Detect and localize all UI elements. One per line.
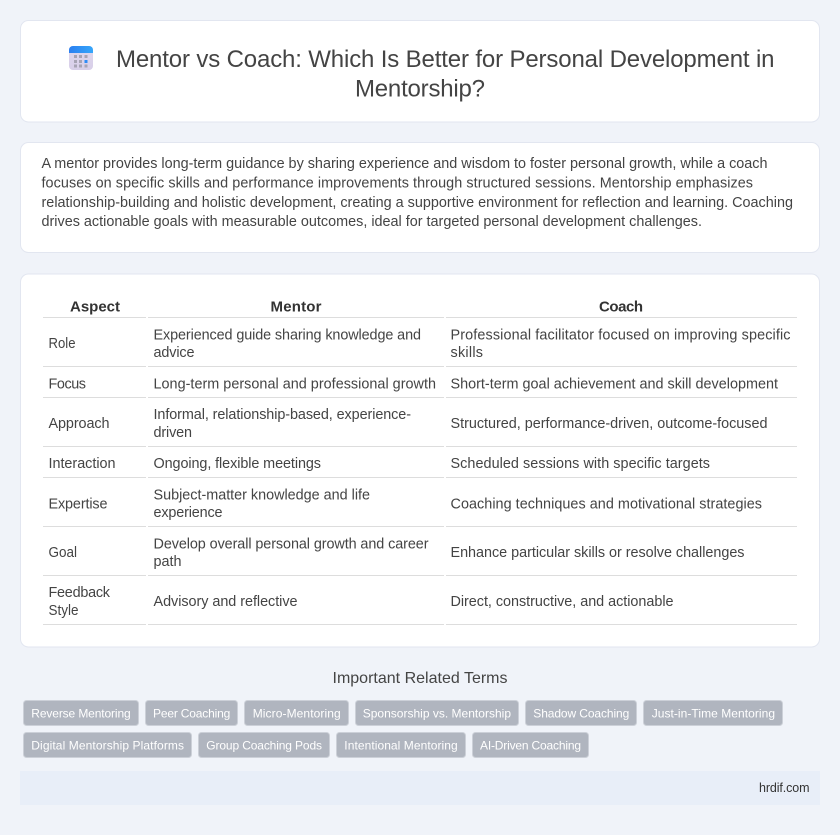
row: Role: advice <box>154 345 194 361</box>
row: Expertise: Coaching techniques and motivational strategies <box>450 496 762 512</box>
footer: hrdif.com <box>759 781 810 795</box>
row: Feedback Style <box>48 585 674 619</box>
tag: Reverse Mentoring <box>31 706 131 720</box>
row: Role: skills <box>450 345 483 361</box>
tag: Sponsorship vs. Mentorship <box>363 706 511 720</box>
row: Approach: Structured, performance-driven, outcome-focused <box>450 416 768 432</box>
text block: summary: drives actionable goals with measurable outcomes, ideal for targeted personal development challenges. <box>42 214 702 230</box>
row: Expertise: Expertise <box>48 496 108 512</box>
row: Expertise: experience <box>154 505 222 521</box>
tag <box>146 700 238 726</box>
row: Role <box>48 328 790 361</box>
tag: Micro-Mentoring <box>253 706 341 720</box>
row: Expertise <box>48 488 762 521</box>
row: Approach <box>48 407 768 441</box>
tag: Just-in-Time Mentoring <box>652 706 775 720</box>
row: Role: Experienced guide sharing knowledge and <box>154 328 421 344</box>
tag <box>24 700 138 726</box>
row: Goal: Develop overall personal growth and career <box>154 536 429 552</box>
tag: Digital Mentorship Platforms <box>31 738 184 752</box>
row: Interaction: Ongoing, flexible meetings <box>154 456 321 472</box>
row: Focus: Short-term goal achievement and skill development <box>450 376 778 392</box>
row: Interaction: Scheduled sessions with specific targets <box>450 456 710 472</box>
table header row: Coach <box>599 298 643 316</box>
row: Goal: Enhance particular skills or resolve challenges <box>450 545 744 561</box>
text block: summary: A mentor provides long-term guidance by sharing experience and wisdom to foster personal growth, while a coach <box>42 156 768 172</box>
tag: AI-Driven Coaching <box>480 738 581 752</box>
row: Role: Professional facilitator focused on improving specific <box>450 328 790 344</box>
table header row: Aspect <box>70 298 120 316</box>
table header row: Mentor <box>270 298 322 316</box>
table header row <box>70 298 643 316</box>
row: Interaction <box>48 456 710 472</box>
text block: summary <box>42 156 793 230</box>
heading: related terms: Important Related Terms <box>332 670 508 687</box>
footer <box>20 771 820 805</box>
row: Role: Role <box>48 336 76 352</box>
row: Approach: Informal, relationship-based, experience- <box>154 407 411 423</box>
row: Feedback Style: Advisory and reflective <box>154 594 298 610</box>
row: Expertise: Subject-matter knowledge and life <box>154 488 370 504</box>
text block: summary: relationship-building and holistic development, creating a supportive environment for reflection and learning. Coaching <box>42 195 793 211</box>
row: Feedback Style: Style <box>48 603 78 619</box>
tag <box>244 700 348 726</box>
panel: summary paragraph <box>20 142 820 252</box>
row: Focus: Focus <box>48 376 86 392</box>
title <box>116 46 774 102</box>
panel: comparison table <box>20 274 820 647</box>
row: Focus: Long-term personal and professional growth <box>154 376 436 392</box>
tag: Peer Coaching <box>153 706 230 720</box>
tag <box>356 700 518 726</box>
icon: calendar <box>69 46 93 70</box>
tag <box>336 732 466 758</box>
tag <box>24 732 192 758</box>
row: Goal: Goal <box>48 545 77 561</box>
row: Approach: driven <box>154 425 192 441</box>
tag <box>644 700 782 726</box>
tag <box>198 732 330 758</box>
row: Approach: Approach <box>48 416 110 432</box>
panel: header <box>20 20 820 122</box>
tag: Shadow Coaching <box>533 706 629 720</box>
title: Mentor vs Coach: Which Is Better for Personal Development in <box>116 46 774 73</box>
row: Goal: path <box>154 554 182 570</box>
row: Feedback Style: Feedback <box>48 585 111 601</box>
tag: Group Coaching Pods <box>206 738 322 752</box>
tag <box>526 700 636 726</box>
text block: summary: focuses on specific skills and performance improvements through structured sessions. Mentorship emphasizes <box>42 176 753 192</box>
row: Feedback Style: Direct, constructive, and actionable <box>450 594 674 610</box>
row: Interaction: Interaction <box>48 456 116 472</box>
tag: Intentional Mentoring <box>344 738 458 752</box>
tags: related terms <box>24 700 782 758</box>
title: Mentorship? <box>355 76 485 102</box>
row: Goal <box>48 536 744 570</box>
tag <box>472 732 588 758</box>
row: Focus <box>48 376 778 392</box>
